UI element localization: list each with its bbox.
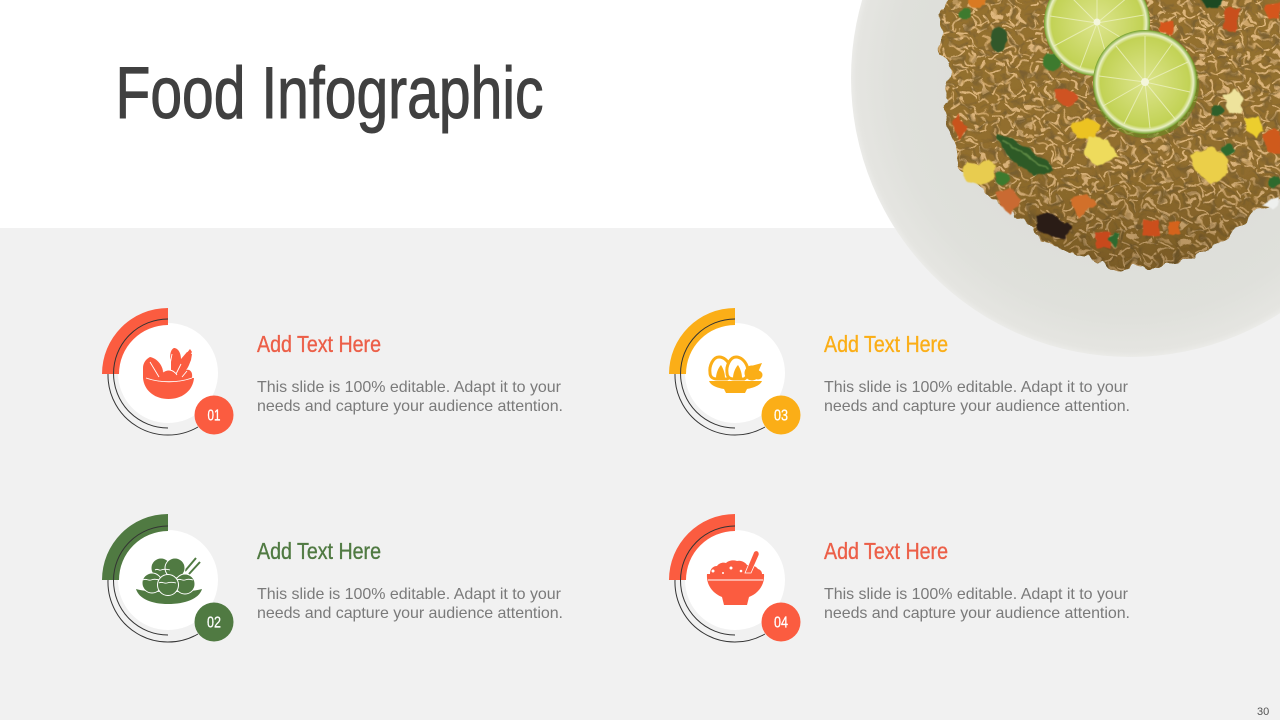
amber quarter arc	[669, 308, 735, 374]
icon: fruit bowl	[709, 357, 762, 393]
orange quarter arc	[102, 308, 168, 374]
food plate photo	[851, 0, 1280, 357]
number badge: 01	[208, 408, 220, 424]
number badge: 02	[207, 614, 221, 632]
thin ring lines	[108, 319, 198, 435]
white icon disc	[118, 323, 218, 423]
number badge	[194, 602, 234, 642]
white icon disc	[685, 530, 785, 630]
panel: item 04	[669, 514, 1130, 642]
number badge	[762, 396, 800, 434]
body text line 2: needs and capture your audience attention.	[824, 605, 1130, 622]
heading: Add Text Here	[257, 331, 381, 357]
body text: This slide is 100% editable. Adapt it to your	[824, 586, 1129, 603]
heading: Add Text Here	[257, 538, 381, 564]
icon: dumplings on plate	[136, 558, 202, 604]
lime slice front	[1093, 30, 1199, 138]
panel: item 03	[669, 308, 1130, 435]
title: Food Infographic	[116, 53, 544, 134]
lime slice back	[1044, 0, 1150, 76]
fried rice	[938, 0, 1280, 270]
white icon disc	[685, 323, 785, 423]
vegetables	[951, 0, 1280, 248]
panel: item 01	[102, 308, 563, 435]
icon: rice bowl with spoon	[707, 551, 764, 605]
number badge	[194, 396, 234, 434]
number badge	[762, 602, 800, 642]
white icon disc	[118, 530, 218, 630]
thin ring lines	[675, 526, 765, 642]
body text: This slide is 100% editable. Adapt it to your	[257, 586, 562, 603]
panel: item 02	[102, 514, 563, 642]
body text line 2: needs and capture your audience attention.	[257, 605, 563, 622]
body text line 2: needs and capture your audience attention.	[257, 398, 563, 415]
body text: This slide is 100% editable. Adapt it to your	[257, 379, 562, 396]
green quarter arc	[102, 514, 168, 580]
coral quarter arc	[669, 514, 735, 580]
plate	[851, 0, 1280, 357]
number badge: 04	[774, 614, 788, 632]
icon: salad bowl	[143, 348, 194, 399]
thin ring lines	[675, 319, 765, 435]
heading: Add Text Here	[824, 331, 948, 357]
heading: Add Text Here	[824, 538, 948, 564]
body text line 2: needs and capture your audience attention.	[824, 398, 1130, 415]
gray background panel	[0, 228, 1280, 720]
thin ring lines	[108, 526, 198, 642]
body text: This slide is 100% editable. Adapt it to your	[824, 379, 1129, 396]
page number: 30	[1257, 706, 1269, 718]
number badge: 03	[774, 408, 788, 424]
